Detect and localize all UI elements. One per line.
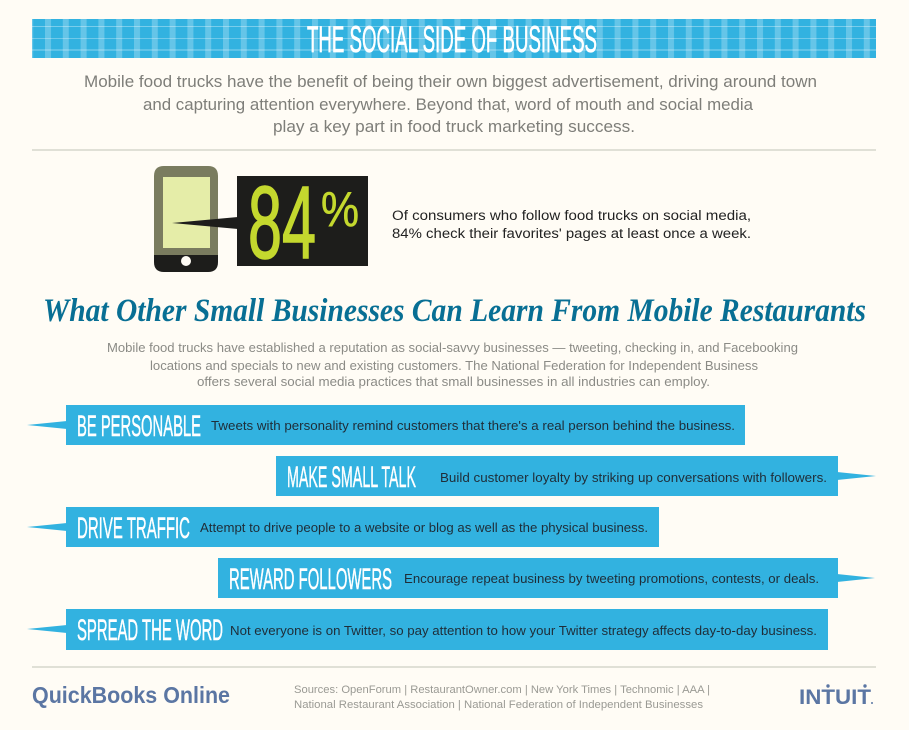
tip: reward followers: Encourage repeat business by tweeting promotions, contests, or deals. <box>404 571 819 586</box>
stat description <box>392 208 751 241</box>
stat: 84%: % <box>321 183 359 237</box>
sources: National Restaurant Association | National Federation of Independent Businesses <box>294 699 704 711</box>
intro text block <box>84 72 817 136</box>
tip: reward followers <box>218 558 875 598</box>
sources <box>294 684 710 711</box>
icon: smartphone with 84% speech bubble <box>154 165 368 280</box>
intro text block: and capturing attention everywhere. Beyond that, word of mouth and social media <box>143 95 754 114</box>
section paragraph: Mobile food trucks have established a reputation as social-savvy businesses — tweeting, checking in, and Facebooking <box>107 341 798 355</box>
stat description: Of consumers who follow food trucks on social media, <box>392 208 751 223</box>
tip: spread the word: SPREAD THE WORD <box>77 614 223 647</box>
logo: QuickBooks Online: QuickBooks Online <box>32 682 230 708</box>
stat: 84%: 84 <box>248 165 316 280</box>
tip: make small talk: Build customer loyalty by striking up conversations with followers. <box>440 470 827 485</box>
logo: Intuit: INTUIT <box>799 686 871 709</box>
stat description: 84% check their favorites' pages at least once a week. <box>392 226 751 241</box>
tip: be personable: BE PERSONABLE <box>77 410 201 443</box>
section paragraph: offers several social media practices that small businesses in all industries can employ. <box>197 375 710 389</box>
tip: spread the word: Not everyone is on Twitter, so pay attention to how your Twitter strategy affects day-to-day business. <box>230 623 817 638</box>
tip: spread the word <box>27 609 828 650</box>
tip: make small talk <box>276 456 876 496</box>
intro text block: Mobile food trucks have the benefit of being their own biggest advertisement, driving around town <box>84 72 817 91</box>
section paragraph <box>107 341 798 389</box>
icon: phone <box>154 166 218 272</box>
tip: drive traffic: DRIVE TRAFFIC <box>77 512 190 545</box>
tip: be personable: Tweets with personality remind customers that there's a real person behind the business. <box>211 418 735 433</box>
banner: title <box>32 19 876 60</box>
intro text block: play a key part in food truck marketing success. <box>273 117 635 136</box>
sources: Sources: OpenForum | RestaurantOwner.com | New York Times | Technomic | AAA | <box>294 684 710 696</box>
tip: drive traffic: Attempt to drive people to a website or blog as well as the physical business. <box>200 520 648 535</box>
heading: the social side of business: THE SOCIAL SIDE OF BUSINESS <box>307 19 597 60</box>
tip: make small talk: MAKE SMALL TALK <box>287 461 416 494</box>
tip: drive traffic <box>27 507 659 547</box>
tip: be personable <box>27 405 745 445</box>
speech bubble <box>172 176 368 266</box>
tip: reward followers: REWARD FOLLOWERS <box>229 563 392 596</box>
section paragraph: locations and specials to new and existing customers. The National Federation for Independent Business <box>150 359 758 373</box>
